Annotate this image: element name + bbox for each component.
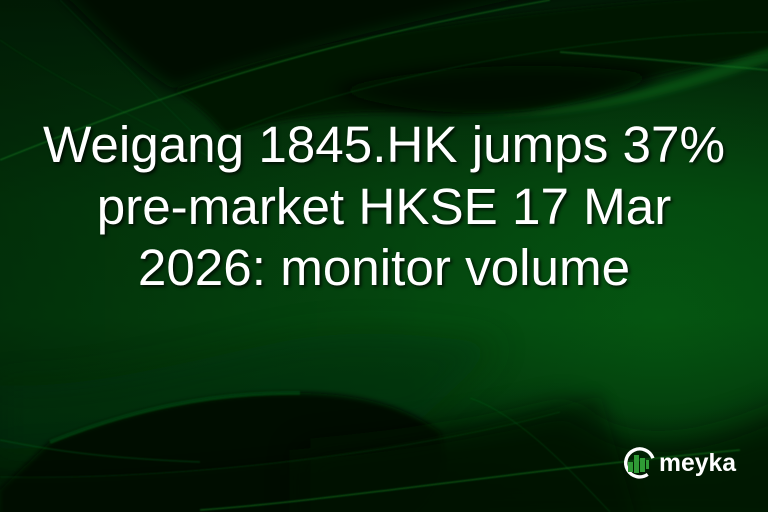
logo: meyka — [624, 447, 737, 479]
light wave: upper right ribbon — [440, 44, 768, 118]
title: 2026: monitor volume — [138, 239, 630, 296]
dark wave: bottom fade — [300, 400, 768, 512]
dark wave: top band — [175, 0, 768, 135]
title: pre-market HKSE 17 Mar — [97, 178, 671, 234]
title: Weigang 1845.HK jumps 37% — [43, 116, 725, 173]
dark wave: upper lens core — [330, 66, 660, 113]
dark wave: top — [50, 0, 600, 90]
logo wordmark: meyka — [659, 449, 737, 477]
dark wave: lower left shadow — [0, 334, 500, 450]
dark wave: lower lens — [0, 393, 444, 512]
dark wave: bottom strip — [0, 395, 640, 512]
icon: logo ring with bars — [622, 445, 655, 480]
title — [43, 116, 726, 296]
